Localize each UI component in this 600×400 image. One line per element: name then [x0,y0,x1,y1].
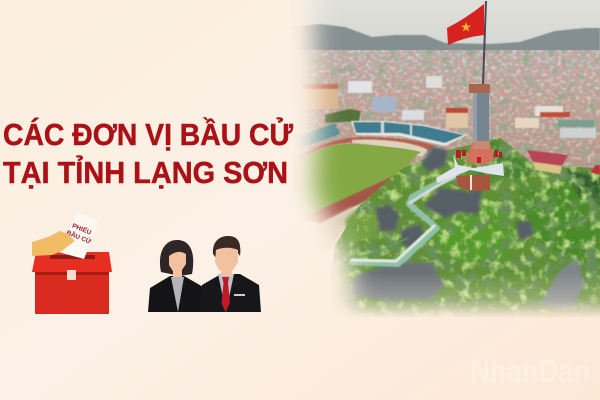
lower track [310,175,394,224]
glass walkway [350,176,455,264]
ballot paper [58,212,99,259]
football field [296,144,421,215]
icon: two delegates [148,236,261,312]
forest hill [332,138,600,317]
title: CÁC ĐƠN VỊ BẦU CỬ [3,116,293,152]
flag tower [436,1,504,191]
stadium stands [295,121,467,148]
flag pole [482,1,487,84]
red-roof building by hill [527,150,600,175]
rocks [350,146,584,310]
city [301,50,600,168]
ballot paper: BẦU CỬ [65,227,94,246]
tower shaft [477,93,489,141]
woman [148,240,205,312]
tower cone [466,142,494,165]
man [199,236,261,312]
lock [67,270,76,280]
running track [302,136,435,157]
Vietnamese flag [447,4,484,45]
box lid [32,252,112,272]
tower base wall [456,175,490,191]
title: TẠI TỈNH LẠNG SƠN [3,155,288,190]
photo: Lang Son city and flag tower [296,0,600,317]
icon: ballot box with hand [32,212,112,314]
title [3,116,293,190]
white balustrade [436,154,504,183]
sky [306,0,600,50]
mountains [300,24,600,50]
box body [35,272,109,314]
hand [32,231,75,256]
tower head [469,84,490,93]
red visitors [456,150,502,163]
ballot paper: PHIẾU [71,220,93,237]
